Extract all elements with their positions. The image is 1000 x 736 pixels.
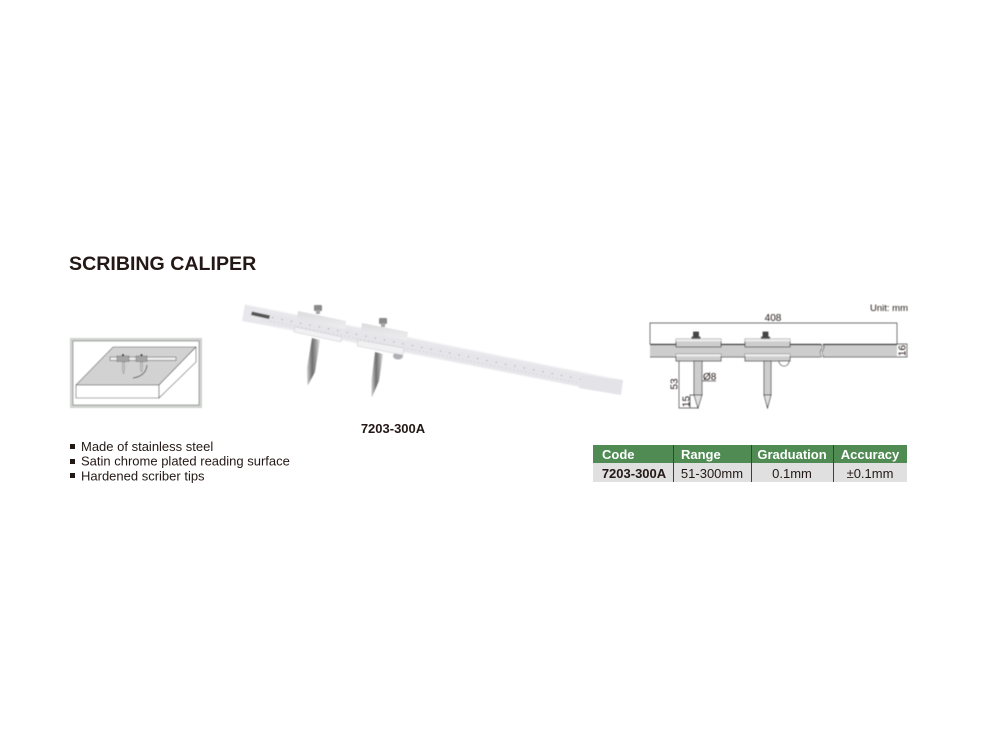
- right slider drawing: [745, 332, 790, 408]
- left slider drawing: [676, 332, 721, 408]
- product label: 7203-300A: [361, 421, 426, 436]
- thumb knob under beam: [393, 352, 403, 360]
- table header: Graduation: [757, 447, 827, 462]
- feature list: [70, 439, 290, 484]
- table row: [593, 463, 907, 482]
- specification table: [593, 445, 907, 482]
- dimension 408: 408: [765, 313, 782, 324]
- table header: Range: [681, 447, 721, 462]
- dimension 15: 15: [682, 396, 692, 407]
- bullet: satin chrome: Satin chrome plated reading surface: [81, 454, 290, 468]
- table row: 7203-300A: [602, 466, 667, 481]
- unit note: Unit: mm: [870, 303, 908, 314]
- right slider: [357, 318, 408, 355]
- right scriber pin: [372, 352, 383, 397]
- dimension diameter 8: Ø8: [703, 372, 717, 383]
- icon: usage illustration of caliper scribing on a block: [72, 340, 200, 406]
- dimension 16: 16: [898, 345, 908, 356]
- table header: Accuracy: [841, 447, 900, 462]
- title: SCRIBING CALIPER: [69, 253, 256, 275]
- dimension 53: [670, 361, 698, 408]
- left slider: [294, 305, 346, 342]
- table header: [593, 445, 907, 463]
- main beam: [242, 304, 623, 395]
- left scriber pin: [307, 338, 320, 385]
- table row: ±0.1mm: [847, 466, 893, 481]
- table row: 0.1mm: [772, 466, 812, 481]
- bar body: [650, 344, 897, 357]
- table row: 51-300mm: [681, 466, 743, 481]
- bullet: scriber tips: Hardened scriber tips: [81, 468, 205, 484]
- dimension 53: 53: [670, 378, 680, 390]
- table header: Code: [602, 447, 634, 462]
- photo: scribing caliper 7203-300A: [242, 304, 623, 397]
- technical drawing with dimensions: [650, 303, 908, 408]
- bullet: stainless steel: Made of stainless steel: [81, 439, 213, 454]
- dimension 408: [650, 313, 897, 344]
